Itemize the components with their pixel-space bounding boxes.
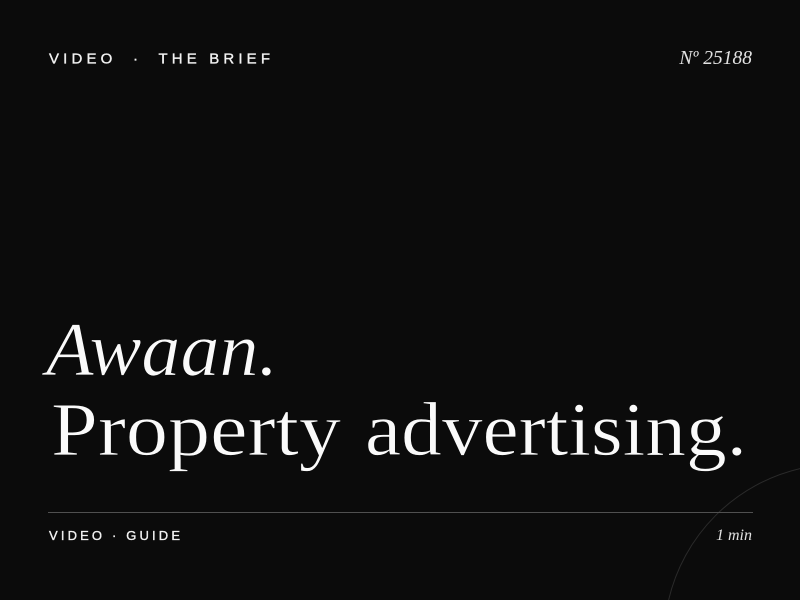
- header label: VIDEO · THE BRIEF: [49, 50, 270, 68]
- title line: topic: advertising.: [365, 388, 747, 472]
- duration: 1 min: [716, 527, 752, 544]
- footer label: VIDEO · GUIDE: [49, 528, 180, 543]
- issue number: Nº 25188: [678, 48, 752, 69]
- title line: topic: Property: [51, 388, 341, 472]
- title line: brand name: Awaan.: [41, 308, 278, 392]
- title: [41, 308, 747, 472]
